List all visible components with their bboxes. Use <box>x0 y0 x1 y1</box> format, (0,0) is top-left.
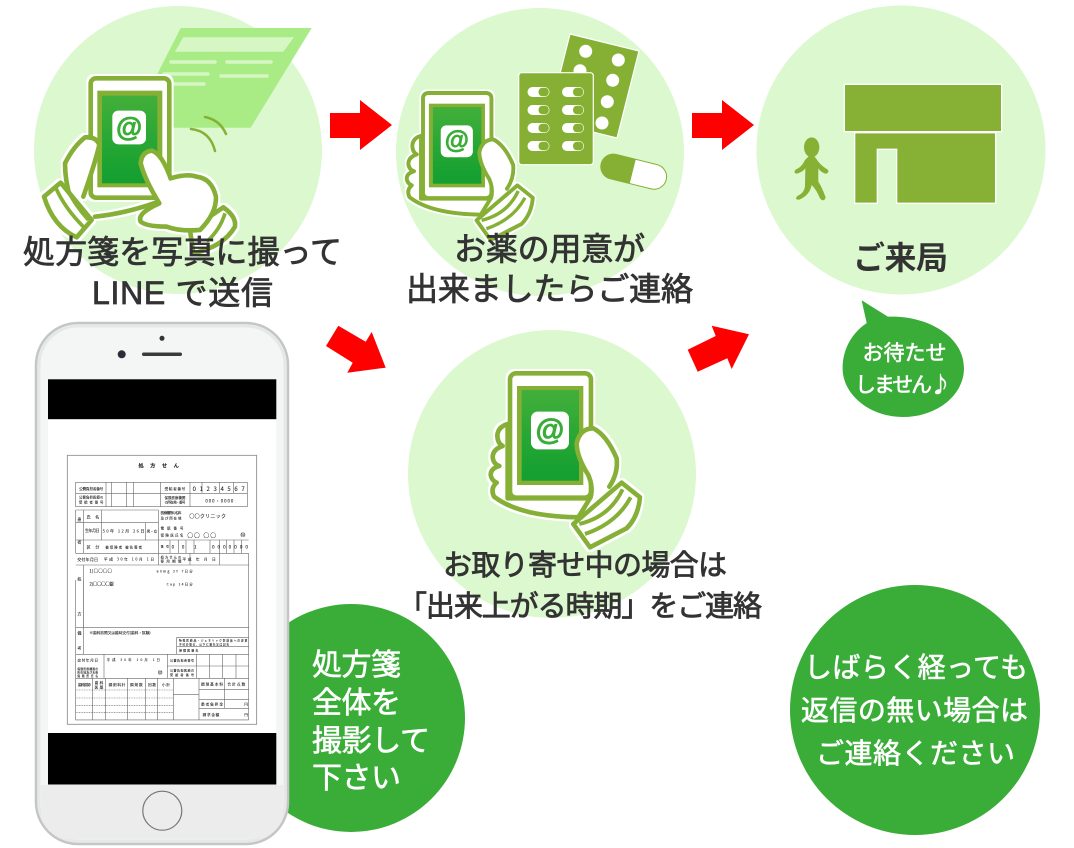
prescription form: 0 0 <box>172 545 185 551</box>
phone body <box>36 323 288 844</box>
prescription form: 保険医氏名 <box>161 533 183 538</box>
prescription form: 電話番号 <box>161 525 184 530</box>
prescription form: Cap 14日分 <box>167 582 193 587</box>
prescription form lower half: 請求金額 <box>203 712 220 718</box>
prescription form <box>67 455 257 724</box>
callout: contact if no reply: しばらく経っても <box>804 652 1028 683</box>
callout: photograph the whole prescription: 処方箋 <box>312 649 401 682</box>
heading: step 2b: お取り寄せ中の場合は <box>443 549 727 582</box>
prescription form: 医療機関の名称 <box>161 510 182 515</box>
prescription form lower half: 公費負担者番号 <box>170 658 194 663</box>
callout: photograph the whole prescription: 撮影して <box>312 725 430 758</box>
prescription form: 番号 <box>161 544 169 549</box>
prescription form lower half: 円 <box>244 702 248 707</box>
speaker <box>142 352 182 356</box>
callout: contact if no reply: ご連絡ください <box>816 738 1015 769</box>
prescription form lower half: 特殊医療品・ジェネリック医薬品への変更 <box>179 638 248 642</box>
icon: medicine blister packs and capsule <box>519 34 669 192</box>
prescription form: 氏名 <box>87 514 99 521</box>
prescription form lower half: 調剤料計 <box>109 682 126 688</box>
icon: store roof <box>844 84 1002 132</box>
icon: person walking <box>794 137 829 200</box>
prescription form lower half: 受給者番号 <box>170 672 194 677</box>
heading: step 2b: 「出来上がる時期」をご連絡 <box>398 590 762 623</box>
prescription form: 及び所在地 <box>161 515 182 520</box>
heading: step 2: お薬の用意が <box>454 231 645 267</box>
prescription form lower half: 保険医署名 <box>179 648 198 653</box>
prescription form lower half: 小計 <box>162 682 170 688</box>
prescription form lower half: 保険医氏名 <box>77 674 98 678</box>
prescription form: 0000000 <box>212 545 248 551</box>
prescription form lower half: 合計点数 <box>227 681 246 687</box>
circle: step 2 background <box>396 8 684 296</box>
prescription form lower half <box>76 580 249 720</box>
screen bottom bar <box>48 733 276 784</box>
prescription form: 受給者番号 <box>165 486 186 492</box>
icon: store building <box>855 133 996 203</box>
prescription form: 生年月日 <box>85 527 100 534</box>
icon: hand tapping smartphone: @ <box>116 112 142 142</box>
heading: step 2: 出来ましたらご連絡 <box>406 271 693 307</box>
prescription form: 平成 30年 10月 1日 <box>104 557 154 563</box>
circle: step 2b background <box>408 330 696 618</box>
prescription form: 保険医療機関 <box>165 495 186 500</box>
prescription form lower half: 回数 <box>148 682 156 688</box>
prescription form lower half: 円 <box>244 713 248 718</box>
prescription form: 使用期間 <box>161 559 182 564</box>
prescription form: 患 <box>77 516 81 523</box>
callout: contact if no reply <box>790 585 1040 835</box>
prescription form: ○○クリニック <box>189 513 226 520</box>
icon: hand holding smartphone, step 2b <box>491 373 640 547</box>
speech bubble: no waiting: しません♪ <box>855 369 951 399</box>
speech bubble: no waiting: お待たせ <box>862 342 946 365</box>
prescription form: 処方せん <box>138 461 180 469</box>
prescription form lower half: 歯科医師 <box>78 682 91 688</box>
prescription form lower half: 調剤基本料 <box>201 681 223 687</box>
heading: step 3 visit: ご来局 <box>853 240 948 276</box>
callout: photograph the whole prescription: 全体を <box>312 687 401 720</box>
prescription form lower half: 歯科 <box>95 680 104 686</box>
prescription form lower half: 公費負担医療の <box>170 668 194 673</box>
prescription form lower half: 平成 30年 10月 1日 <box>107 657 160 662</box>
screen document area <box>48 419 276 733</box>
prescription form: 0 1 2 3 4 5 6 7 <box>193 484 245 493</box>
arrow: step 1 to step 2b <box>326 326 386 373</box>
prescription form lower half: 方 <box>77 610 81 617</box>
icon: hand tapping smartphone <box>44 78 235 253</box>
callout: contact if no reply: 返信の無い場合は <box>801 695 1028 726</box>
icon: pharmacy store with person <box>794 84 1002 203</box>
prescription form: 男・女 <box>147 529 158 535</box>
prescription form lower half: 調剤数 <box>130 682 143 688</box>
icon: hand holding smartphone, step 2: @ <box>445 128 469 155</box>
circle: step 3 background <box>756 6 1046 294</box>
prescription form: 処 <box>77 576 81 583</box>
front camera <box>118 350 126 358</box>
prescription form lower half: 不可の場合、以下に署名又は記名 <box>179 642 229 646</box>
arrow: step 2b to step 3 <box>688 326 749 372</box>
prescription form lower half: 考 <box>77 644 81 651</box>
prescription form: 50年 12月 26日 <box>103 528 144 535</box>
prescription form lower half: 交付年月日 <box>77 657 98 663</box>
prescription form: 者 <box>77 538 81 545</box>
heading: step 1: 処方箋を写真に撮って <box>23 234 342 270</box>
icon: hand holding smartphone, step 2 <box>407 93 533 240</box>
callout: photograph the whole prescription: 下さい <box>312 762 401 795</box>
icon: hand holding smartphone, step 2b: @ <box>536 413 564 446</box>
prescription form: 60mg 3T 7日分 <box>157 568 193 573</box>
prescription form: ○○ ○○ <box>187 530 216 539</box>
sensor <box>160 336 164 341</box>
screen top bar <box>48 379 276 419</box>
circle: step 1 background <box>34 6 322 294</box>
prescription form: 1 <box>194 545 197 551</box>
prescription form lower half: 備 <box>77 630 81 637</box>
prescription form: ㊞ <box>241 532 246 539</box>
heading: step 2 <box>406 231 693 307</box>
speech bubble: no waiting <box>843 301 964 417</box>
prescription form: 公費負担医療の <box>79 495 104 500</box>
arrow: step 2 to step 3 <box>692 100 754 150</box>
heading: step 2b <box>398 549 762 623</box>
callout: photograph the whole prescription <box>237 604 465 832</box>
prescription form lower half: 所在地及び名称 <box>77 671 98 675</box>
icon: prescription sheet <box>130 28 312 151</box>
prescription form lower half: ※歯科訪問又は臨時交付(歯科・試験) <box>89 630 151 636</box>
prescription form: 受給者番号 <box>79 500 104 505</box>
prescription form: 2)○○○○錠 <box>89 580 115 587</box>
heading: step 1: LINE で送信 <box>92 275 273 311</box>
home button <box>143 791 182 830</box>
prescription form lower half: 保険医療機関の <box>77 667 98 671</box>
prescription form: 公費負担者番号 <box>79 486 104 492</box>
prescription form: 1)○○○○ <box>89 568 113 575</box>
heading: step 1 <box>23 234 342 311</box>
prescription form: の所在地・番号 <box>165 500 186 505</box>
prescription form lower half: 医薬 <box>95 685 104 691</box>
prescription form: 平成 年 月 日 <box>182 557 216 563</box>
prescription form: 区分 <box>87 543 99 550</box>
prescription form lower half: 患者負担金 <box>201 701 223 707</box>
prescription form: 交付年月日 <box>77 556 98 563</box>
prescription form: 被保険者 被扶養者 <box>105 544 143 549</box>
prescription form: 000・0000 <box>205 499 234 505</box>
prescription form: 処方せんの <box>161 554 182 559</box>
smartphone showing prescription <box>36 323 288 844</box>
prescription form lower half: ㊞ <box>158 669 163 676</box>
arrow: step 1 to step 2 <box>330 100 392 150</box>
